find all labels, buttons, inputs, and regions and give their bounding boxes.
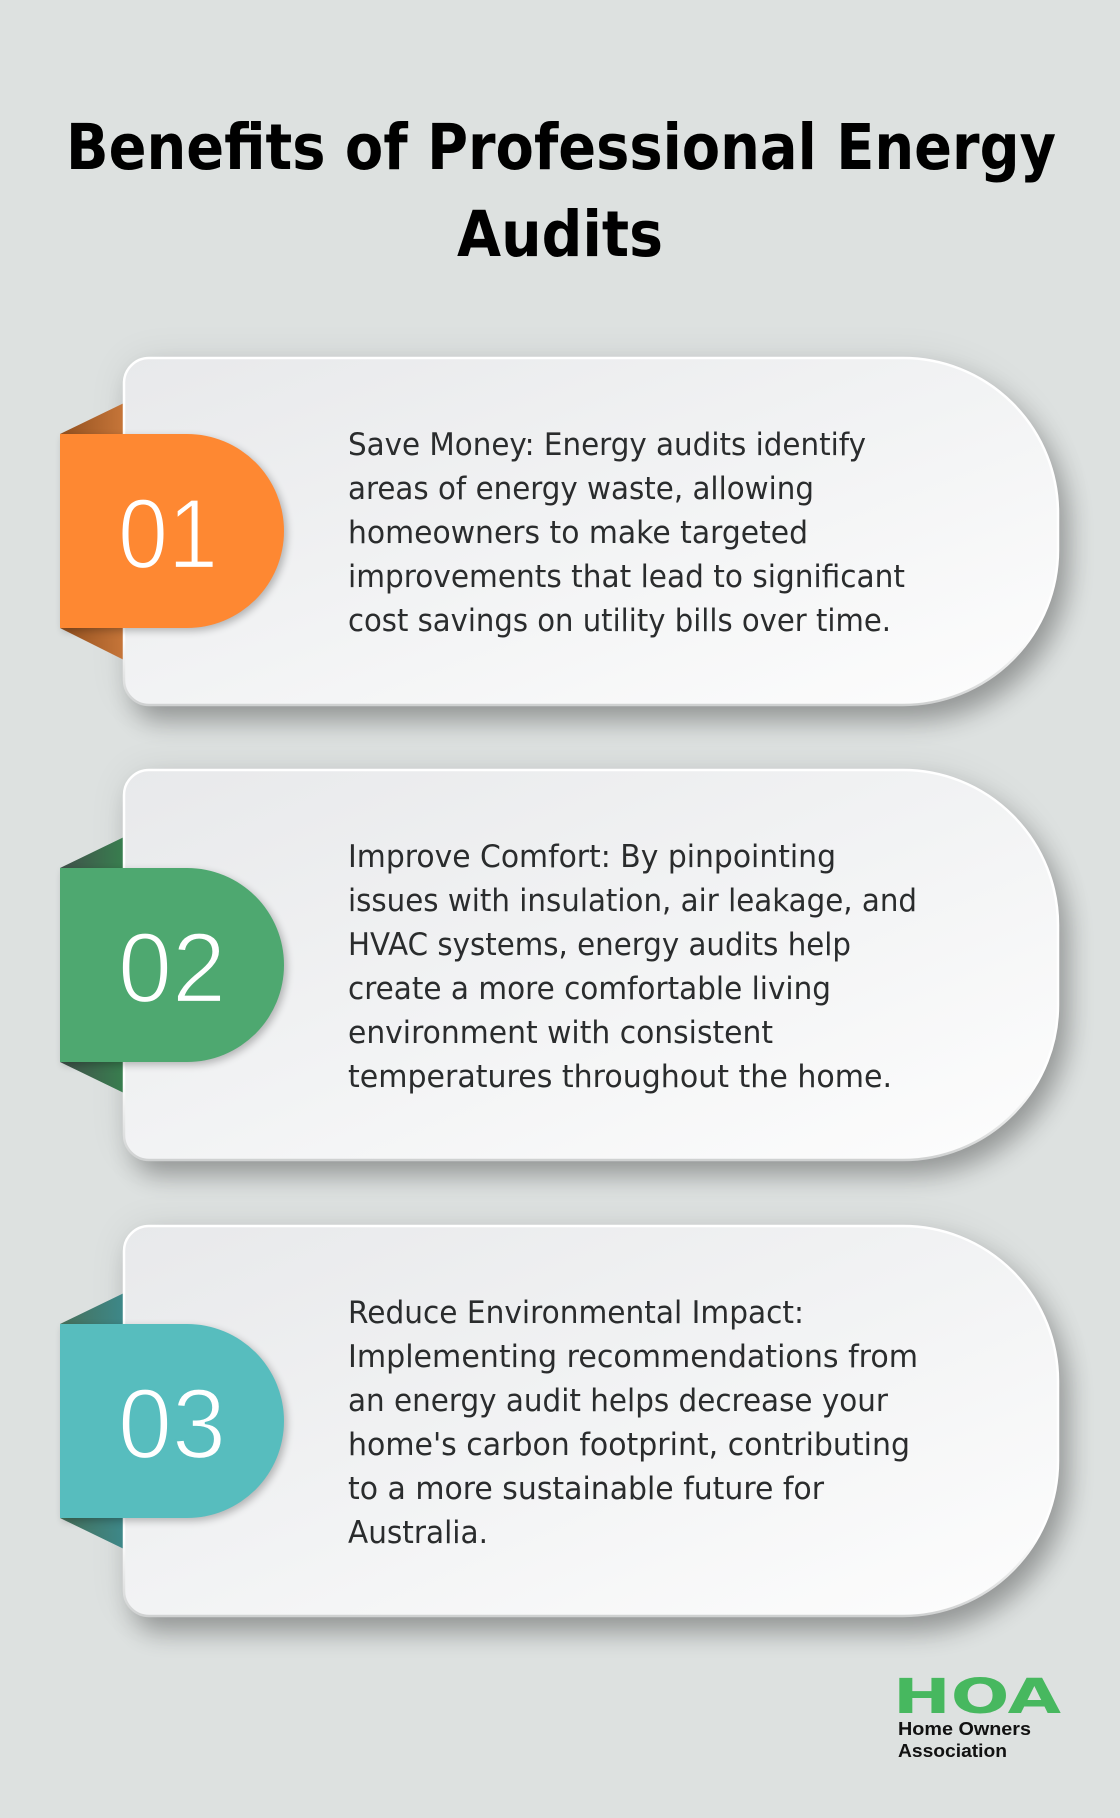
text: save money: improvements that lead to significant: [348, 559, 905, 595]
title: Audits: [457, 198, 663, 271]
card 2: [124, 770, 1058, 1160]
logo: HOA: [893, 1669, 1061, 1761]
text: save money: areas of energy waste, allowing: [348, 471, 814, 507]
text: reduce environmental impact: Reduce Environmental Impact:: [348, 1295, 804, 1331]
text: improve comfort: create a more comfortable living: [348, 971, 831, 1007]
text: save money: Save Money: Energy audits identify: [348, 427, 866, 463]
badge 02: 02: [118, 912, 226, 1023]
text: save money: cost savings on utility bills over time.: [348, 603, 891, 639]
card 1: [124, 358, 1058, 705]
green fold top: [60, 837, 126, 868]
text: reduce environmental impact: Implementing recommendations from: [348, 1339, 918, 1375]
text: save money: [348, 427, 905, 639]
badge 01: 01: [118, 478, 218, 589]
card shadow 2: [124, 770, 1068, 1175]
panel: save money: [60, 358, 1068, 721]
text: improve comfort: HVAC systems, energy audits help: [348, 927, 851, 963]
logo tagline: Home Owners: [898, 1718, 1031, 1739]
text: improve comfort: environment with consistent: [348, 1015, 773, 1051]
text: improve comfort: issues with insulation, air leakage, and: [348, 883, 917, 919]
text: save money: homeowners to make targeted: [348, 515, 808, 551]
badge shadow 1: [63, 437, 287, 631]
text: reduce environmental impact: [348, 1295, 918, 1551]
logo tagline: Association: [898, 1740, 1007, 1761]
orange fold top: [60, 403, 126, 434]
badge 03: [60, 1324, 284, 1518]
text: improve comfort: [348, 839, 917, 1095]
teal fold bottom: [60, 1518, 126, 1549]
badge shadow 2: [63, 871, 287, 1065]
card shadow 1: [124, 358, 1068, 721]
logo tagline: [898, 1718, 1031, 1761]
logo wordmark: HOA: [893, 1669, 1061, 1725]
text: reduce environmental impact: an energy audit helps decrease your: [348, 1383, 888, 1419]
badge 03: 03: [118, 1368, 226, 1479]
teal fold top: [60, 1293, 126, 1324]
badge shadow 3: [63, 1327, 287, 1521]
text: reduce environmental impact: Australia.: [348, 1515, 488, 1551]
badge 02: [60, 868, 284, 1062]
text: improve comfort: Improve Comfort: By pinpointing: [348, 839, 836, 875]
panel: improve comfort: [60, 770, 1068, 1175]
title: [66, 111, 1056, 271]
text: reduce environmental impact: to a more sustainable future for: [348, 1471, 824, 1507]
orange fold bottom: [60, 628, 126, 660]
card 3: [124, 1226, 1058, 1616]
text: improve comfort: temperatures throughout the home.: [348, 1059, 892, 1095]
text: reduce environmental impact: home's carbon footprint, contributing: [348, 1427, 910, 1463]
badge 01: [60, 434, 284, 628]
card shadow 3: [124, 1226, 1068, 1632]
green fold bottom: [60, 1062, 126, 1093]
panel: reduce environmental impact: [60, 1226, 1068, 1632]
